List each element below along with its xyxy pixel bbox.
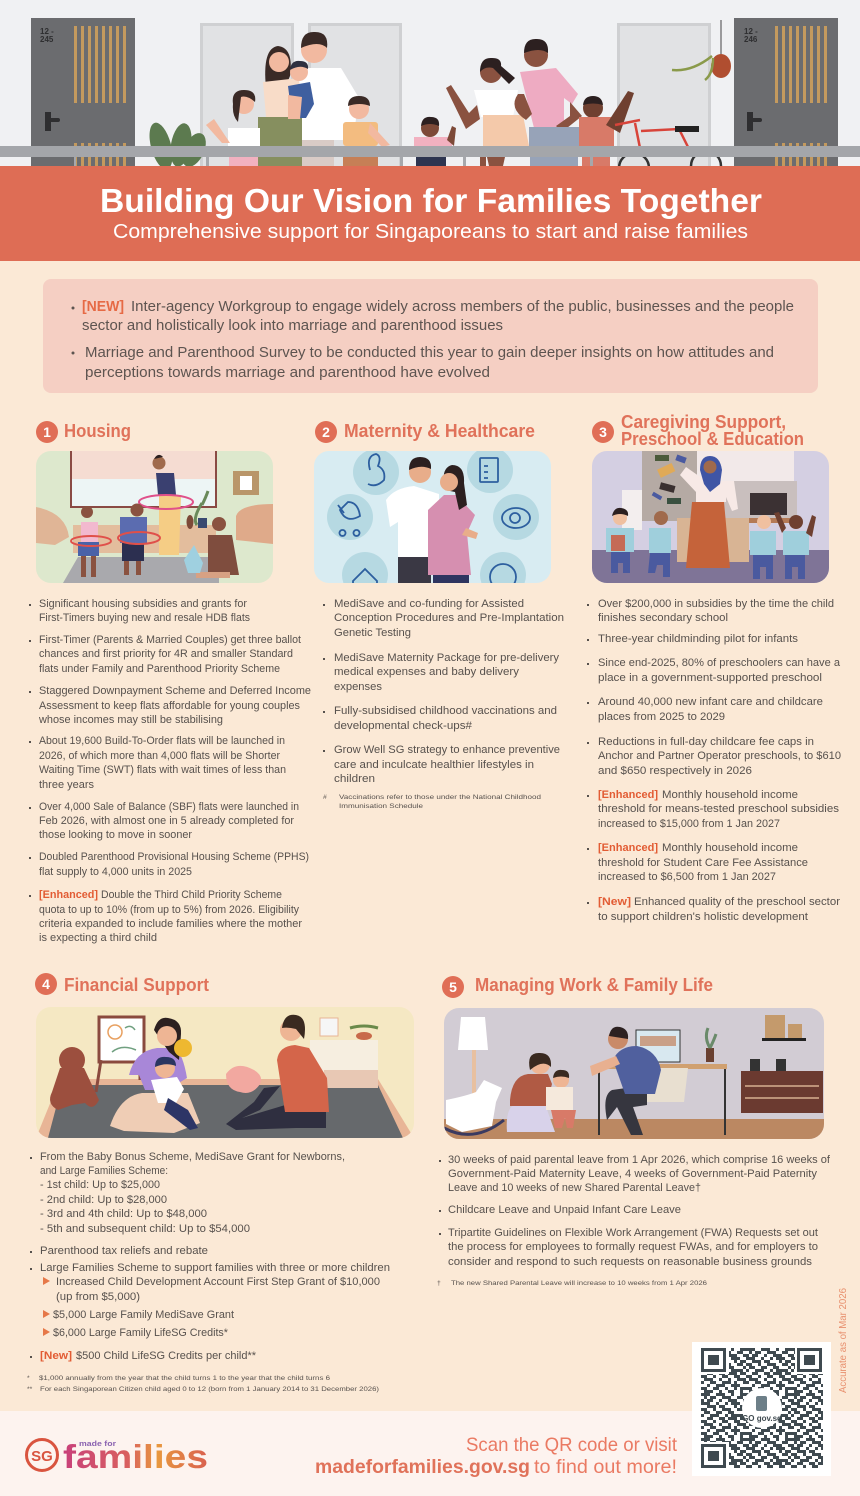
panel: financial support bbox=[27, 973, 414, 1393]
bullet list: financial: - 2nd child: Up to $28,000 bbox=[40, 1194, 167, 1206]
bullet list: financial: ** bbox=[27, 1386, 33, 1393]
heading: housing bbox=[36, 421, 131, 443]
heading: maternity: Maternity & Healthcare bbox=[344, 421, 535, 441]
bullet list: caregiving: place in a government-supported preschool bbox=[598, 672, 822, 684]
hero illustration: HDB corridor with families bbox=[0, 0, 860, 183]
date note: Accurate as of Mar 2026 bbox=[838, 1288, 849, 1393]
QR code: GO gov.sg bbox=[742, 1414, 782, 1423]
logo: SG made for families bbox=[26, 1438, 208, 1475]
bullet list: housing bbox=[29, 598, 311, 944]
bullet list: financial bbox=[27, 1151, 390, 1393]
heading: work and family: 5 bbox=[449, 979, 457, 995]
bullet list: caregiving: Three-year childminding pilot for infants bbox=[598, 633, 799, 645]
bullet list: housing: flat supply to 4,000 units in 2025 bbox=[39, 866, 192, 878]
bullet list: caregiving: [Enhanced] bbox=[598, 842, 658, 854]
bullet list: financial: From the Baby Bonus Scheme, MediSave Grant for Newborns, bbox=[40, 1151, 345, 1163]
panel: managing work and family life bbox=[437, 975, 831, 1287]
bullet list: maternity: Vaccinations refer to those under the National Childhood bbox=[339, 794, 541, 801]
bullet list: financial: * bbox=[27, 1375, 30, 1382]
bullet list: work and family: † bbox=[437, 1280, 441, 1287]
bullet list: housing: Staggered Downpayment Scheme and Deferred Income bbox=[39, 685, 311, 697]
illustration: parent working from home with family bbox=[444, 1008, 824, 1139]
bullet list: caregiving: to support children's holistic development bbox=[598, 911, 808, 923]
bullet list: maternity: developmental check-ups# bbox=[334, 720, 472, 732]
bullet list: financial: $1,000 annually from the year that the child turns 1 to the year that the child turns 6 bbox=[39, 1375, 330, 1382]
bullet list: housing: First-Timer (Parents & Married Couples) get three ballot bbox=[39, 634, 301, 646]
grey corridor doors bbox=[202, 24, 710, 170]
bullet list: caregiving: threshold for Student Care Fee Assistance bbox=[598, 857, 808, 869]
family two bbox=[414, 39, 634, 166]
intro callout box: Marriage and Parenthood Survey to be conducted this year to gain deeper insights on how attitudes and bbox=[85, 345, 774, 361]
title: Building Our Vision for Families Together bbox=[100, 182, 762, 219]
heading: financial: 4 bbox=[42, 976, 50, 992]
bullet list: financial: $500 Child LifeSG Credits per child** bbox=[76, 1350, 257, 1362]
bullet list: work and family: The new Shared Parental Leave will increase to 10 weeks from 1 Apr 2026 bbox=[451, 1280, 707, 1287]
corridor railing bbox=[0, 146, 860, 166]
bullet list: caregiving: Around 40,000 new infant care and childcare bbox=[598, 696, 823, 708]
bullet list: financial: Large Families Scheme to support families with three or more children bbox=[40, 1262, 390, 1274]
intro callout box: perceptions towards marriage and parenthood have evolved bbox=[85, 365, 490, 381]
bullet list: financial: For each Singaporean Citizen child aged 0 to 12 (born from 1 January 2014 to 31 December 2026) bbox=[40, 1386, 379, 1393]
bullet list: maternity: children bbox=[334, 773, 375, 785]
illustration: preschool teacher with children bbox=[592, 451, 829, 583]
bullet list: maternity: MediSave and co-funding for Assisted bbox=[334, 598, 524, 610]
heading: caregiving: 3 bbox=[599, 424, 607, 440]
bullet list: housing: Waiting Time (SWT) flats with wait times of less than bbox=[39, 764, 286, 776]
bullet list: housing: flats under Family and Parenthood Priority Scheme bbox=[39, 663, 280, 675]
bullet list: caregiving: [New] bbox=[598, 896, 631, 908]
bullet list: work and family: Leave and 10 weeks of new Shared Parental Leave† bbox=[448, 1182, 701, 1194]
logo: SG made for families: SG bbox=[31, 1448, 53, 1465]
panel: maternity and healthcare bbox=[314, 421, 564, 810]
bullet list: caregiving: Over $200,000 in subsidies by the time the child bbox=[598, 598, 834, 610]
bullet list: financial: - 5th and subsequent child: Up to $54,000 bbox=[40, 1223, 250, 1235]
call to action: madeforfamilies.gov.sg bbox=[315, 1456, 530, 1478]
bullet list: caregiving: places from 2025 to 2029 bbox=[598, 711, 725, 723]
illustration: expecting couple with health icons bbox=[314, 451, 551, 583]
logo: SG made for families: families bbox=[63, 1438, 208, 1475]
heading: housing: Housing bbox=[64, 421, 131, 441]
bullet list: housing: Over 4,000 Sale of Balance (SBF) flats were launched in bbox=[39, 801, 299, 813]
intro callout box: sector and holistically look into marriage and parenthood issues bbox=[82, 318, 503, 334]
bullet list: maternity: care and inculcate healthier lifestyles in bbox=[334, 759, 534, 771]
heading: financial: Financial Support bbox=[64, 975, 209, 995]
call to action bbox=[315, 1434, 678, 1478]
bullet list: caregiving: Reductions in full-day childcare fee caps in bbox=[598, 736, 814, 748]
plant bbox=[145, 120, 211, 172]
bullet list: work and family: Childcare Leave and Unpaid Infant Care Leave bbox=[448, 1204, 681, 1216]
bullet list: maternity: medical expenses and baby delivery bbox=[334, 666, 520, 678]
heading: work and family: Managing Work & Family Life bbox=[475, 975, 713, 995]
bullet list: housing: 2026, of which more than 4,000 flats will be Shorter bbox=[39, 750, 280, 762]
bullet list: caregiving: Since end-2025, 80% of preschoolers can have a bbox=[598, 657, 840, 669]
bullet list: financial: - 1st child: Up to $25,000 bbox=[40, 1179, 160, 1191]
intro callout box: Inter-agency Workgroup to engage widely across members of the public, businesses and the people bbox=[131, 299, 794, 315]
heading: caregiving: Caregiving Support, bbox=[621, 412, 786, 432]
bullet list: work and family: Government-Paid Maternity Leave, 4 weeks of Government-Paid Paternity bbox=[448, 1168, 818, 1180]
bicycle bbox=[615, 120, 721, 183]
call to action: to find out more! bbox=[534, 1456, 677, 1478]
QR code bbox=[692, 1342, 831, 1476]
bullet list: financial: $5,000 Large Family MediSave Grant bbox=[53, 1309, 234, 1321]
heading: maternity: 2 bbox=[322, 424, 330, 440]
bullet list: caregiving: [Enhanced] bbox=[598, 789, 658, 801]
bullet list: caregiving: increased to $15,000 from 1 Jan 2027 bbox=[598, 818, 780, 830]
heading: caregiving: Preschool & Education bbox=[621, 429, 804, 449]
bullet list: maternity: MediSave Maternity Package for pre-delivery bbox=[334, 652, 560, 664]
illustration: family at home with hula hoops bbox=[36, 451, 273, 583]
intro callout box: [NEW] bbox=[82, 299, 124, 315]
bullet list: maternity: Grow Well SG strategy to enhance preventive bbox=[334, 744, 560, 756]
logo: SG made for families: made for bbox=[79, 1439, 116, 1448]
bullet list: housing: Assessment to keep flats affordable for young couples bbox=[39, 700, 301, 712]
footer band bbox=[0, 1411, 860, 1496]
title banner bbox=[0, 166, 860, 261]
bullet list: caregiving bbox=[587, 598, 841, 923]
bullet list: maternity: # bbox=[323, 794, 327, 801]
bullet list: maternity: Genetic Testing bbox=[334, 627, 411, 639]
bullet list: housing: First-Timers buying new and resale HDB flats bbox=[39, 612, 251, 624]
bullet list: caregiving: Enhanced quality of the preschool sector bbox=[634, 896, 840, 908]
bullet list: housing: chances and first priority for 4R and smaller Standard bbox=[39, 648, 293, 660]
right unit door 12-246 bbox=[734, 18, 838, 166]
right unit door 12-246: 12 - bbox=[744, 27, 758, 36]
bullet list: housing: Double the Third Child Priority Scheme bbox=[101, 889, 282, 901]
bullet list: housing: Feb 2026, with almost one in 5 already completed for bbox=[39, 815, 294, 827]
bullet list: maternity bbox=[323, 598, 564, 810]
left unit door 12-245: 12 - bbox=[40, 27, 54, 36]
bullet list: maternity: Immunisation Schedule bbox=[339, 803, 423, 810]
bullet list: caregiving: Anchor and Partner Operator preschools, to $610 bbox=[598, 750, 841, 762]
bullet list: housing: Significant housing subsidies and grants for bbox=[39, 598, 247, 610]
bullet list: housing: quota to up to 10% (from up to 5%) from 2026. Eligibility bbox=[39, 904, 300, 916]
bullet list: caregiving: and $650 respectively in 2026 bbox=[598, 765, 752, 777]
bullet list: housing: criteria expanded to include families where the mother bbox=[39, 918, 302, 930]
bullet list: housing: whose incomes may still be stabilising bbox=[38, 714, 223, 726]
bullet list: housing: [Enhanced] bbox=[39, 889, 98, 901]
subtitle: Comprehensive support for Singaporeans to start and raise families bbox=[113, 221, 748, 243]
bullet list: caregiving: Monthly household income bbox=[662, 842, 798, 854]
bullet list: work and family: Tripartite Guidelines on Flexible Work Arrangement (FWA) Requests set out bbox=[448, 1227, 818, 1239]
bullet list: financial: Parenthood tax reliefs and rebate bbox=[40, 1245, 208, 1257]
left unit door 12-245 bbox=[31, 18, 135, 166]
bullet list: caregiving: threshold for means-tested preschool subsidies bbox=[598, 803, 840, 815]
panel: caregiving support, preschool and education bbox=[587, 412, 841, 923]
family one bbox=[206, 32, 390, 166]
bullet list: work and family: the process for employees to formally request FWAs, and for employers to bbox=[448, 1241, 818, 1253]
bullet list: financial: [New] bbox=[40, 1350, 72, 1362]
intro callout box bbox=[43, 279, 818, 393]
bullet list: housing: About 19,600 Build-To-Order flats will be launched in bbox=[39, 735, 285, 747]
bullet list: housing: Doubled Parenthood Provisional Housing Scheme (PPHS) bbox=[39, 851, 309, 863]
panel: housing bbox=[29, 421, 311, 944]
bullet list: housing: those looking to move in sooner bbox=[39, 829, 192, 841]
bullet list: caregiving: Monthly household income bbox=[662, 789, 798, 801]
bullet list: maternity: expenses bbox=[334, 681, 383, 693]
heading: caregiving bbox=[592, 412, 804, 449]
hanging plant bbox=[672, 20, 731, 80]
bullet list: work and family bbox=[437, 1154, 831, 1287]
right unit door 12-246: 246 bbox=[744, 35, 758, 44]
heading: housing: 1 bbox=[43, 424, 51, 440]
bullet list: financial: $6,000 Large Family LifeSG Credits* bbox=[53, 1327, 229, 1339]
bullet list: housing: three years bbox=[39, 779, 95, 791]
bullet list: housing: is expecting a third child bbox=[39, 932, 157, 944]
bullet list: financial: and Large Families Scheme: bbox=[40, 1165, 168, 1177]
bullet list: caregiving: finishes secondary school bbox=[598, 612, 728, 624]
bullet list: maternity: Conception Procedures and Pre-Implantation bbox=[334, 612, 564, 624]
call to action: Scan the QR code or visit bbox=[466, 1434, 678, 1456]
bullet list: financial: (up from $5,000) bbox=[56, 1291, 140, 1303]
bullet list: work and family: 30 weeks of paid parental leave from 1 Apr 2026, which comprise 16 weeks of bbox=[448, 1154, 831, 1166]
bullet list: maternity: Fully-subsidised childhood vaccinations and bbox=[334, 705, 557, 717]
bullet list: financial: - 3rd and 4th child: Up to $48,000 bbox=[40, 1208, 207, 1220]
bullet list: caregiving: increased to $6,500 from 1 Jan 2027 bbox=[598, 871, 776, 883]
bullet list: work and family: consider and respond to such requests on reasonable business grounds bbox=[448, 1256, 813, 1268]
left unit door 12-245: 245 bbox=[40, 35, 54, 44]
bullet list: financial: Increased Child Development Account First Step Grant of $10,000 bbox=[56, 1276, 380, 1288]
illustration: parents with child and piggy bank bbox=[36, 1007, 414, 1138]
